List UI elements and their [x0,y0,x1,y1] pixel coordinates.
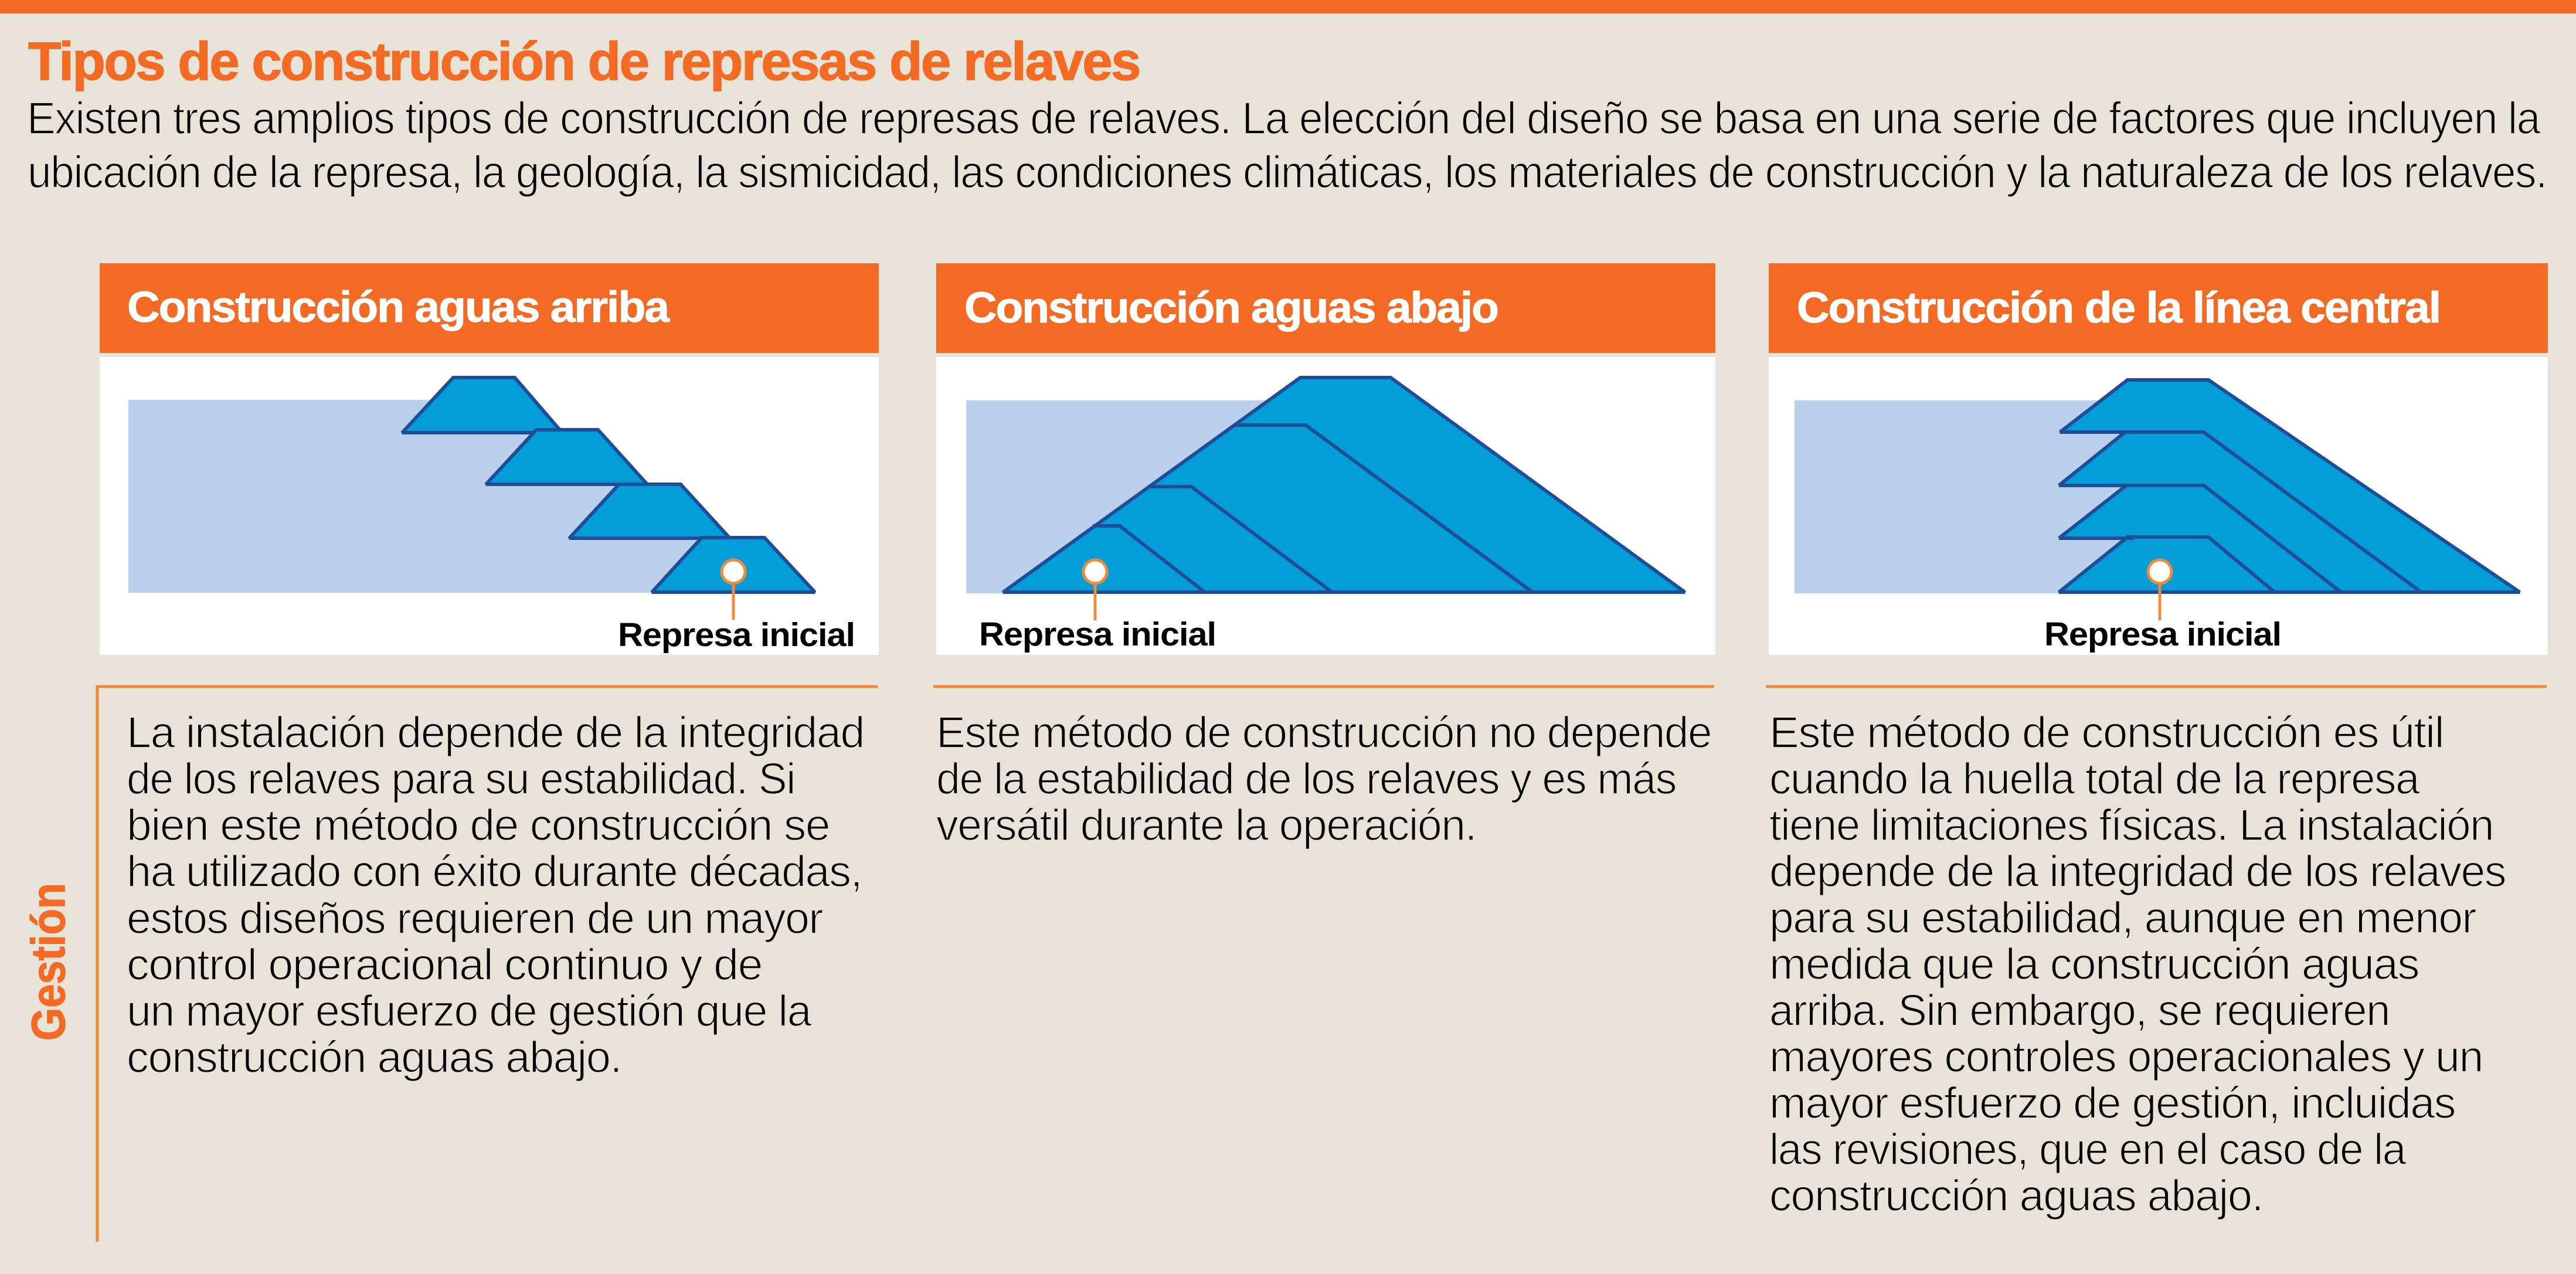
body text: línea central: Este método de construcción es útil [1769,708,2444,757]
intro text [27,93,2547,198]
body text: línea central: las revisiones, que en el caso de la [1769,1124,2407,1174]
body text: línea central: tiene limitaciones físicas. La instalación [1769,800,2493,850]
panel: construcción de la línea central [1766,263,2548,1220]
body text: aguas arriba: estos diseños requieren de un mayor [127,894,823,943]
body text: aguas arriba: un mayor esfuerzo de gestión que la [127,986,812,1035]
body text: aguas abajo: de la estabilidad de los relaves y es más [936,754,1676,803]
diagram: aguas arriba [100,357,879,655]
header: aguas abajo [936,263,1715,353]
body text: línea central [1766,687,2547,1220]
body text: aguas arriba [97,685,878,1242]
header: aguas arriba [100,263,879,353]
title: Tipos de construcción de represas de relaves [28,32,1140,91]
body text: aguas abajo: versátil durante la operación. [936,800,1476,850]
body text: aguas arriba: construcción aguas abajo. [127,1032,621,1082]
body text: línea central: arriba. Sin embargo, se requieren [1769,986,2390,1035]
body text: línea central: mayores controles operacionales y un [1769,1032,2483,1081]
body text: aguas arriba: de los relaves para su estabilidad. Si [127,754,795,803]
diagram: línea central [1769,357,2548,655]
body text: aguas arriba: bien este método de construcción se [127,800,830,850]
body text: aguas arriba: control operacional continuo y de [127,940,762,989]
diagram: aguas abajo [936,357,1715,655]
diagram: línea central: Represa inicial [2044,616,2281,653]
body text: aguas arriba: ha utilizado con éxito durante décadas, [127,847,862,896]
body text: aguas abajo: Este método de construcción no depende [936,708,1711,757]
body text: línea central: para su estabilidad, aunque en menor [1769,893,2476,942]
body text: línea central: construcción aguas abajo. [1769,1171,2263,1220]
diagram: aguas arriba: Represa inicial [618,616,855,654]
body text: aguas abajo [933,687,1714,850]
body text: línea central: mayor esfuerzo de gestión, incluidas [1769,1078,2455,1127]
side label: Gestión: Gestión [22,883,75,1041]
header: línea central: Construcción de la línea central [1797,283,2440,332]
diagram: aguas abajo: Represa inicial [979,616,1216,653]
top orange bar [0,0,2576,13]
panel: construcción aguas abajo [933,263,1715,850]
body text: línea central: depende de la integridad de los relaves [1769,847,2506,896]
header: aguas arriba: Construcción aguas arriba [127,283,670,331]
header: aguas abajo: Construcción aguas abajo [964,283,1498,332]
header: línea central [1769,263,2548,353]
body text: aguas arriba: La instalación depende de la integridad [127,708,864,757]
body text: línea central: medida que la construcción aguas [1769,939,2419,988]
panel: construcción aguas arriba [97,263,879,1242]
body text: línea central: cuando la huella total de la represa [1769,754,2420,803]
